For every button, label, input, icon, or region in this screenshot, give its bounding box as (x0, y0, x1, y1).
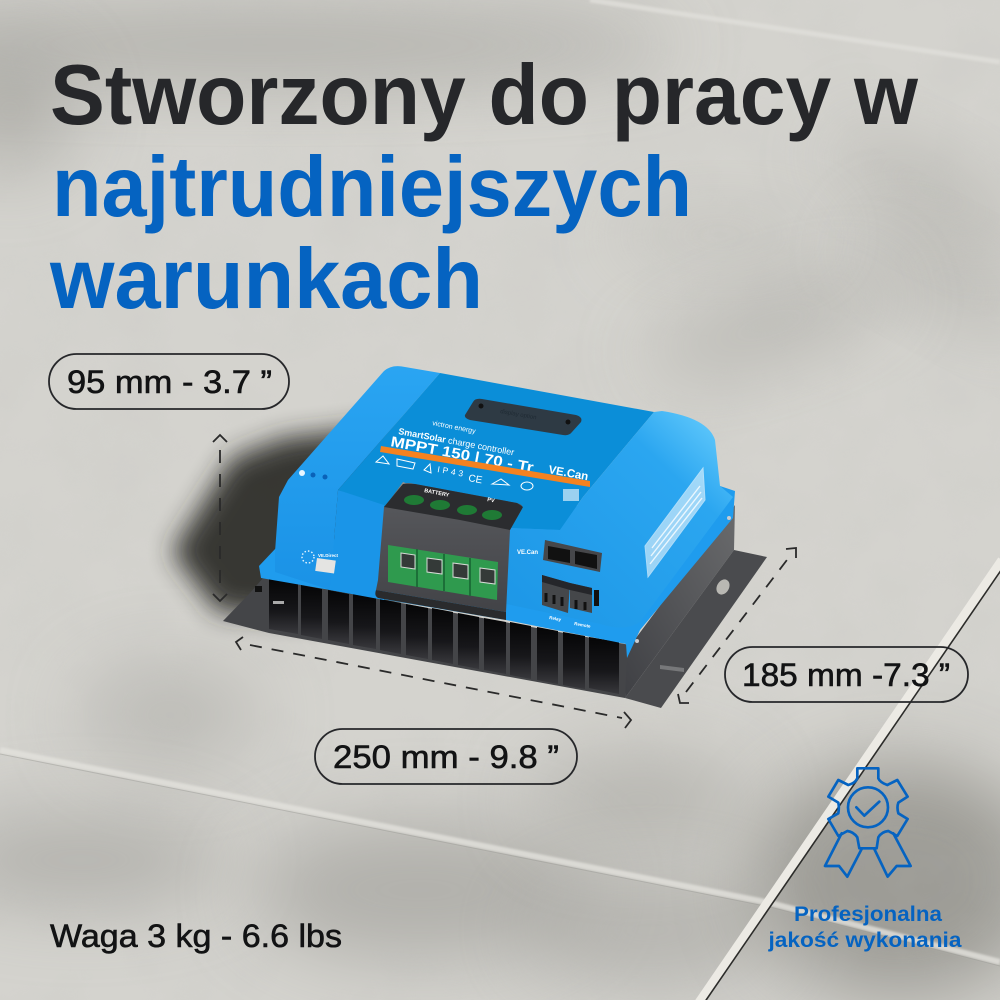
depth dimension arrow (678, 548, 796, 703)
relay connectors: Relay (549, 615, 562, 622)
badge caption: jakość wykonania (767, 929, 962, 952)
badge caption (767, 903, 962, 952)
right side wall and flange (625, 505, 735, 698)
body left panel (275, 366, 440, 590)
logo and product labels: MPPT 150 | 70 - Tr (389, 434, 535, 476)
display cover plate: display option (500, 409, 537, 421)
pill: depth (725, 647, 968, 702)
title: Stworzony do pracy w (50, 48, 919, 143)
pill: width (315, 729, 577, 784)
pill: height: 95 mm - 3.7 ” (67, 364, 272, 400)
heat sink fins (269, 579, 619, 694)
display cover plate (465, 399, 581, 435)
logo and product labels: VE.Can (547, 464, 589, 483)
icon: quality badge gear with ribbons (825, 768, 911, 877)
mounting slots (255, 577, 732, 672)
width dimension arrow (236, 637, 631, 728)
device cast shadow (172, 425, 400, 620)
body right panel (506, 411, 733, 628)
logo and product labels: victron energy (432, 420, 477, 435)
title (49, 48, 919, 327)
logo and product labels (389, 420, 589, 486)
terminal block (375, 483, 523, 620)
title: najtrudniejszych (52, 140, 692, 235)
badge caption: Profesjonalna (794, 903, 942, 926)
VE.Can ports: VE.Can (517, 550, 538, 556)
title: warunkach (49, 232, 483, 327)
orange stripe (380, 446, 590, 487)
weight text: Waga 3 kg - 6.6 lbs (50, 918, 342, 954)
terminal block: PV (487, 497, 495, 504)
pill: height (49, 354, 289, 409)
terminal block: BATTERY (424, 488, 450, 499)
pill: depth: 185 mm -7.3 ” (742, 657, 950, 693)
logo and product labels: CE (467, 473, 483, 486)
heat sink base plate (223, 578, 630, 698)
VE.Can ports (517, 540, 602, 572)
USB port: VE.Direct (318, 553, 339, 558)
body top face (338, 373, 654, 530)
screws (635, 516, 731, 643)
body front panel (330, 490, 384, 600)
blue base (259, 486, 735, 658)
logo and product labels: SmartSolar charge controller (398, 426, 515, 457)
USB port (302, 551, 339, 574)
status LEDs (299, 470, 328, 480)
warning icons (376, 456, 579, 501)
logo and product labels: IP43 (437, 464, 464, 479)
right vent label (645, 468, 705, 577)
pill: width: 250 mm - 9.8 ” (333, 739, 559, 775)
product: MPPT solar charge controller (223, 366, 767, 708)
height dimension arrow (213, 435, 227, 601)
relay connectors (542, 575, 599, 629)
relay connectors: Remote (574, 621, 591, 629)
green connector (388, 545, 498, 600)
